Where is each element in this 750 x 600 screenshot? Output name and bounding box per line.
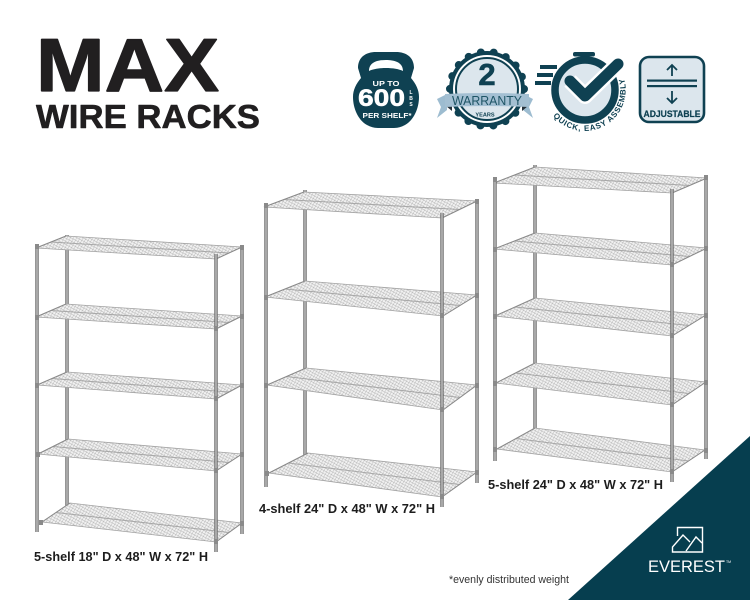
- icon: quick easy assembly stopwatch: [535, 52, 626, 132]
- caption: 24 inch 5-shelf rack: 5-shelf 24" D x 48" W x 72" H: [488, 478, 663, 492]
- icon: kettlebell 600 lbs per shelf: S: [409, 102, 413, 108]
- rack: 4-shelf 24 inch deep: [264, 190, 477, 507]
- rack: 5-shelf 18 inch deep: [36, 235, 242, 552]
- icon: kettlebell 600 lbs per shelf: [353, 52, 419, 128]
- icon: kettlebell 600 lbs per shelf: L: [409, 90, 413, 96]
- corner brand panel: [568, 436, 750, 600]
- footnote: *evenly distributed weight: [449, 574, 569, 586]
- icon: 2 years warranty badge: WARRANTY: [452, 94, 523, 108]
- title: [36, 23, 260, 135]
- icon: 2 years warranty badge: YEARS: [475, 112, 495, 118]
- icon: adjustable: ADJUSTABLE: [644, 109, 700, 119]
- heading: WIRE RACKS: WIRE RACKS: [36, 98, 260, 135]
- icon: adjustable: [640, 57, 704, 122]
- brand name: EVEREST: [648, 557, 725, 576]
- rack: 5-shelf 24 inch deep: [494, 165, 707, 482]
- heading: MAX: MAX: [36, 23, 219, 107]
- icon: quick easy assembly stopwatch: QUICK, EASY ASSEMBLY: [554, 80, 626, 132]
- icon: kettlebell 600 lbs per shelf: 600: [358, 85, 405, 112]
- icon: kettlebell 600 lbs per shelf: B: [409, 96, 413, 102]
- icon: 2 years warranty badge: [437, 51, 533, 127]
- icon: 2 years warranty badge: 2: [478, 57, 496, 92]
- icon: kettlebell 600 lbs per shelf: UP TO: [372, 79, 400, 88]
- icon: kettlebell 600 lbs per shelf: PER SHELF*: [362, 113, 412, 120]
- caption: 4-shelf rack: 4-shelf 24" D x 48" W x 72" H: [259, 502, 435, 516]
- corner brand panel: TM: [726, 560, 731, 564]
- caption: 18 inch rack: 5-shelf 18" D x 48" W x 72" H: [34, 550, 208, 564]
- icon: Everest logo: [672, 528, 702, 552]
